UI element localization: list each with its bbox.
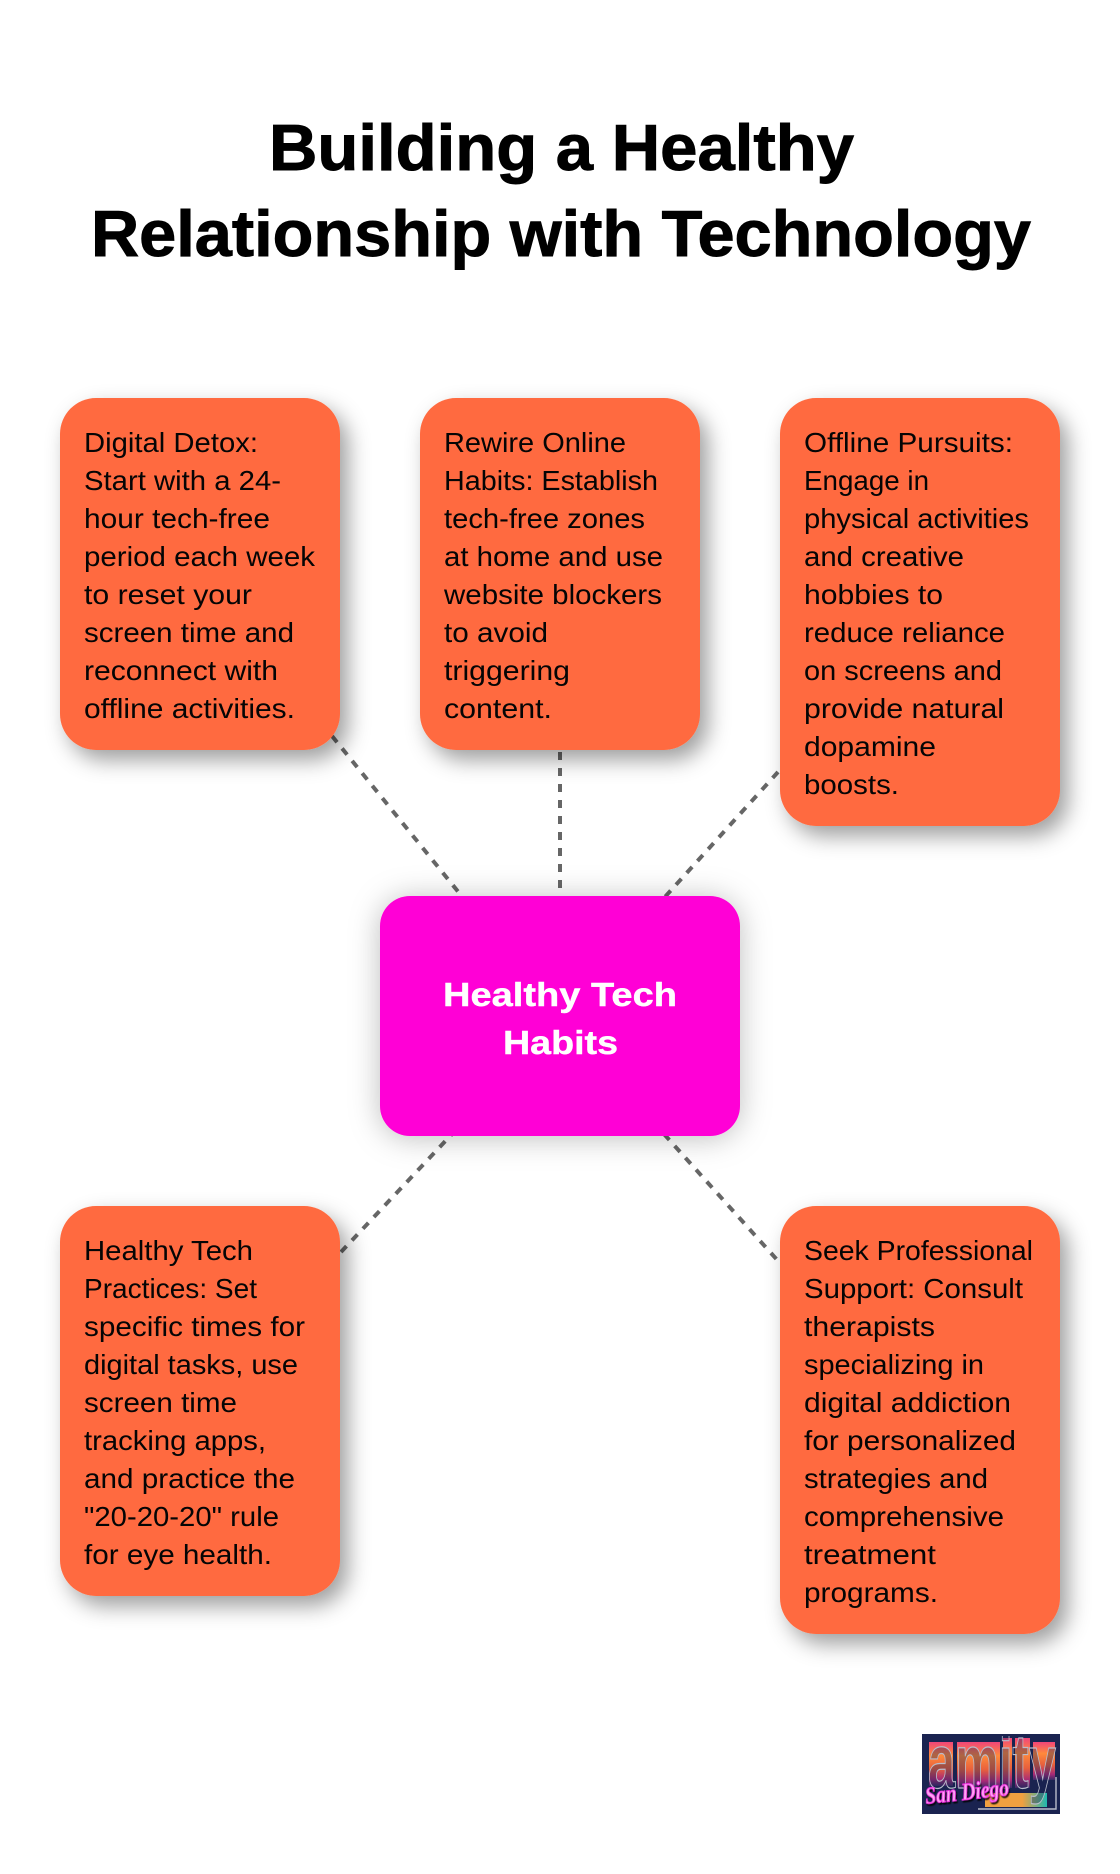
text: Healthy Tech Practices description: tracking apps, xyxy=(84,1425,266,1456)
title: Relationship with Technology xyxy=(91,198,1031,270)
connector: Offline Pursuits to center xyxy=(664,772,778,898)
text: Rewire Online Habits description: to avoid xyxy=(444,617,548,648)
text: Digital Detox description: reconnect with xyxy=(84,655,278,686)
panel: Digital Detox xyxy=(60,398,340,750)
text: Rewire Online Habits description: tech-free zones xyxy=(444,503,645,534)
text: Rewire Online Habits description: content. xyxy=(444,693,552,724)
logo: Amity San Diego: San Diego xyxy=(924,1775,1010,1810)
text: Seek Professional Support description: comprehensive xyxy=(804,1501,1004,1532)
text: Seek Professional Support description: programs. xyxy=(804,1577,938,1608)
connector: Healthy Tech Practices to center xyxy=(341,1134,452,1252)
text: Seek Professional Support description xyxy=(804,1235,1033,1608)
panel: Healthy Tech Practices xyxy=(60,1206,340,1596)
text: Healthy Tech Practices description: specific times for xyxy=(84,1311,305,1342)
text: Offline Pursuits description: boosts. xyxy=(804,769,899,800)
text: Rewire Online Habits description: Habits: Establish xyxy=(444,465,658,496)
text: Seek Professional Support description: strategies and xyxy=(804,1463,988,1494)
text: center heading xyxy=(443,976,677,1061)
text: Healthy Tech Practices description xyxy=(84,1235,305,1570)
panel: Rewire Online Habits xyxy=(420,398,700,750)
text: Digital Detox description: hour tech-free xyxy=(84,503,270,534)
connector: Rewire Online Habits to center xyxy=(558,752,562,888)
text: Digital Detox description xyxy=(84,427,315,724)
text: Healthy Tech Practices description: Practices: Set xyxy=(84,1273,257,1304)
text: center heading: Healthy Tech xyxy=(443,976,677,1013)
title xyxy=(91,112,1031,270)
text: Offline Pursuits description: hobbies to xyxy=(804,579,943,610)
text: Rewire Online Habits description: Rewire Online xyxy=(444,427,626,458)
text: Healthy Tech Practices description: digital tasks, use xyxy=(84,1349,298,1380)
text: Seek Professional Support description: therapists xyxy=(804,1311,935,1342)
title: Building a Healthy xyxy=(269,112,854,184)
text: Offline Pursuits description xyxy=(804,427,1029,800)
text: Healthy Tech Practices description: "20-20-20" rule xyxy=(84,1501,279,1532)
text: Offline Pursuits description: and creative xyxy=(804,541,964,572)
text: Offline Pursuits description: dopamine xyxy=(804,731,936,762)
text: Offline Pursuits description: physical activities xyxy=(804,503,1029,534)
text: Healthy Tech Practices description: and practice the xyxy=(84,1463,295,1494)
text: Digital Detox description: screen time and xyxy=(84,617,294,648)
text: Offline Pursuits description: Engage in xyxy=(804,465,929,496)
panel: center Healthy Tech Habits xyxy=(380,896,740,1136)
text: center heading: Habits xyxy=(503,1024,618,1061)
text: Seek Professional Support description: Support: Consult xyxy=(804,1273,1023,1304)
text: Digital Detox description: offline activities. xyxy=(84,693,295,724)
text: Rewire Online Habits description: triggering xyxy=(444,655,570,686)
text: Offline Pursuits description: reduce reliance xyxy=(804,617,1005,648)
connector: Digital Detox to center xyxy=(332,736,460,894)
text: Seek Professional Support description: specializing in xyxy=(804,1349,984,1380)
text: Healthy Tech Practices description: for eye health. xyxy=(84,1539,272,1570)
text: Offline Pursuits description: on screens and xyxy=(804,655,1002,686)
connector: Seek Professional Support to center xyxy=(664,1134,779,1262)
text: Seek Professional Support description: digital addiction xyxy=(804,1387,1011,1418)
text: Digital Detox description: Digital Detox: xyxy=(84,427,258,458)
text: Healthy Tech Practices description: Healthy Tech xyxy=(84,1235,253,1266)
text: Digital Detox description: to reset your xyxy=(84,579,252,610)
text: Digital Detox description: Start with a 24- xyxy=(84,465,281,496)
text: Offline Pursuits description: Offline Pursuits: xyxy=(804,427,1013,458)
text: Rewire Online Habits description: at home and use xyxy=(444,541,663,572)
text: Rewire Online Habits description xyxy=(443,427,663,724)
text: Seek Professional Support description: Seek Professional xyxy=(804,1235,1033,1266)
text: Digital Detox description: period each week xyxy=(84,541,315,572)
text: Rewire Online Habits description: website blockers xyxy=(443,579,662,610)
panel: Seek Professional Support xyxy=(780,1206,1060,1634)
text: Seek Professional Support description: treatment xyxy=(804,1539,936,1570)
logo: Amity San Diego xyxy=(922,1734,1060,1814)
text: Seek Professional Support description: for personalized xyxy=(804,1425,1016,1456)
text: Offline Pursuits description: provide natural xyxy=(804,693,1004,724)
panel: Offline Pursuits xyxy=(780,398,1060,826)
text: Healthy Tech Practices description: screen time xyxy=(84,1387,237,1418)
